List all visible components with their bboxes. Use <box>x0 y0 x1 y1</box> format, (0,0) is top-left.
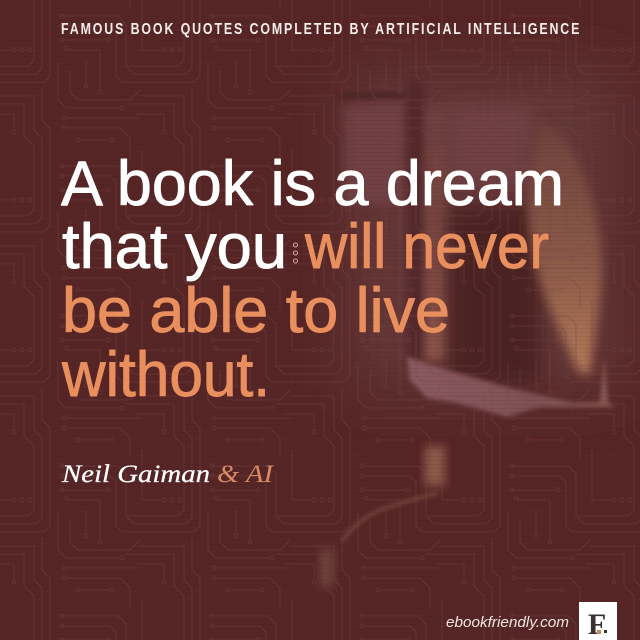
AI credit: & AI <box>217 461 275 488</box>
photo: window pane right <box>448 105 533 185</box>
photo: window pane left <box>345 104 405 204</box>
quote line 2: AI part: will never <box>304 212 549 282</box>
background photo: reader by a window <box>320 70 620 587</box>
quote line 2: human part: that you <box>62 212 287 282</box>
photo: window bar <box>407 80 424 360</box>
logo <box>579 602 617 640</box>
header: FAMOUS BOOK QUOTES COMPLETED BY ARTIFICIAL INTELLIGENCE <box>61 20 579 37</box>
photo: shoulder line <box>342 493 438 541</box>
photo: open book and arm <box>407 356 614 417</box>
photo: peach patch below book <box>425 446 445 486</box>
photo: dark interior <box>449 205 541 385</box>
author name: Neil Gaiman <box>61 461 210 488</box>
attribution <box>61 461 275 488</box>
separator: three dots <box>294 243 298 263</box>
quote line 3: be able to live <box>62 276 450 346</box>
quote line 1: A book is a dream <box>61 149 564 219</box>
quote line 4: without. <box>61 340 270 410</box>
photo: window frame vertical <box>426 105 447 360</box>
photo: hair <box>528 125 602 375</box>
photo: ambient glow <box>350 70 620 390</box>
website label: ebookfriendly.com <box>446 614 569 631</box>
quote text <box>61 149 564 410</box>
photo: lower left patch <box>320 549 334 587</box>
photo: window top shadow <box>340 92 406 99</box>
